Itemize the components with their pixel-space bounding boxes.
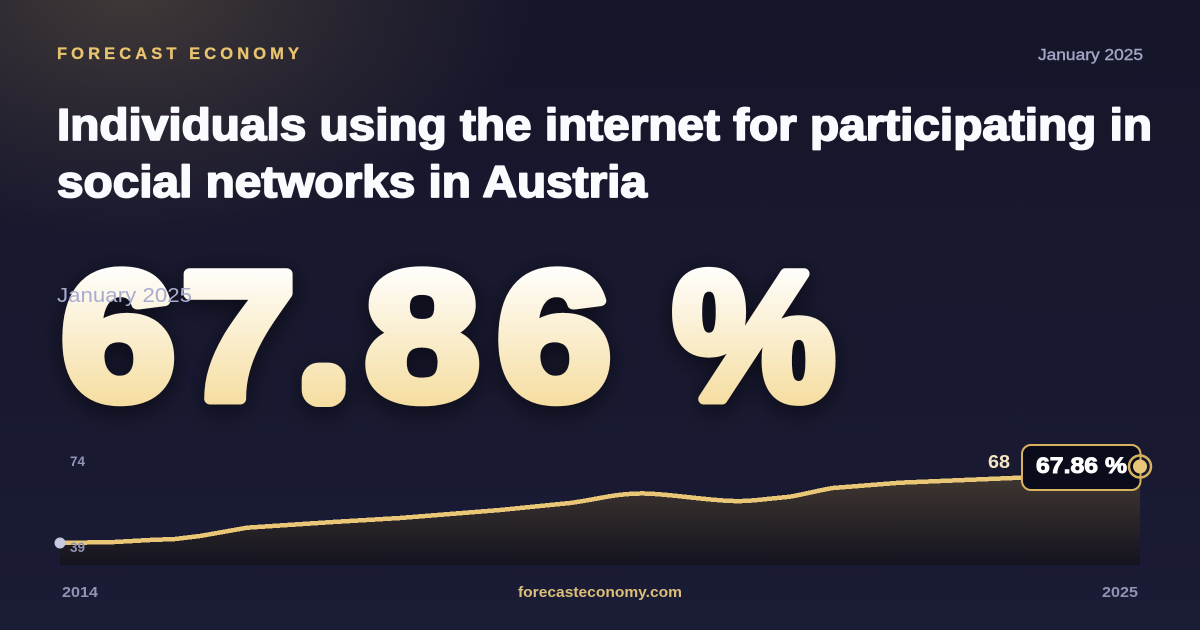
big value: 86 — [365, 235, 611, 438]
title — [57, 101, 1152, 207]
big value: % — [673, 234, 835, 438]
value badge — [1022, 445, 1140, 490]
title: Individuals using the internet for participating in — [57, 101, 1152, 150]
y axis min label: 39 — [70, 540, 85, 555]
area fill — [60, 467, 1140, 565]
source link: forecasteconomy.com — [518, 585, 682, 601]
big value — [61, 234, 835, 438]
value badge: 67.86 % — [1036, 453, 1127, 478]
date label: January 2025 — [1038, 47, 1143, 64]
big value: 67 — [61, 235, 295, 438]
big value: . — [314, 327, 333, 405]
overlapping date label: January 2025 — [57, 284, 192, 307]
y axis max label: 74 — [70, 454, 86, 469]
area chart — [54, 467, 1140, 565]
x axis start label: 2014 — [62, 585, 98, 601]
trend line — [60, 477, 1030, 543]
end marker — [1129, 456, 1151, 478]
brand label: FORECAST ECONOMY — [57, 45, 299, 63]
title: social networks in Austria — [57, 158, 648, 207]
start marker — [54, 538, 66, 548]
x axis end label: 2025 — [1102, 585, 1138, 601]
last rounded value label: 68 — [988, 451, 1010, 472]
